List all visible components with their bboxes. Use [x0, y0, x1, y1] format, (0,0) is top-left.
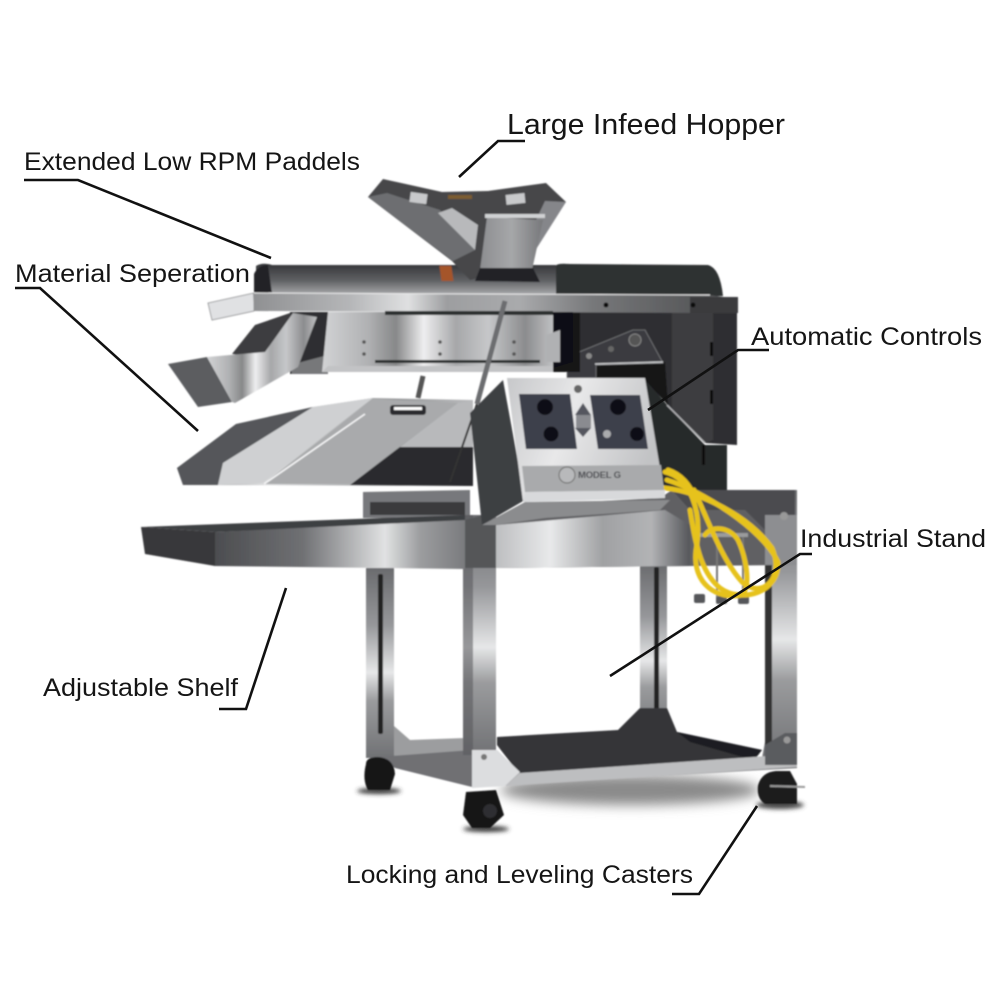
- pan right face: [400, 402, 473, 447]
- callout: large infeed hopper: Large Infeed Hopper: [507, 109, 785, 141]
- casters: [364, 757, 805, 828]
- callout: extended low rpm paddels: Extended Low RPM Paddels: [24, 148, 360, 176]
- callout: material seperation: [15, 260, 250, 431]
- control box face: [507, 378, 665, 502]
- direction arrows: [575, 403, 591, 437]
- top rail: [253, 293, 738, 313]
- brand text: MODEL G: [578, 470, 621, 481]
- front left leg: [463, 515, 520, 788]
- lower rails: [378, 733, 797, 787]
- hose fittings: [694, 533, 749, 604]
- control box side: [470, 380, 525, 525]
- yellow air hoses: [665, 470, 778, 596]
- pan bright band: [218, 398, 373, 485]
- callout: material seperation: Material Seperation: [15, 260, 250, 288]
- lower separation pan: [177, 376, 473, 486]
- left lip: [208, 293, 254, 320]
- brand logo: [559, 467, 575, 483]
- callout: large infeed hopper: [459, 109, 785, 177]
- right dial panel: [590, 395, 648, 449]
- callout: adjustable shelf: [43, 588, 286, 709]
- under box: [290, 311, 573, 374]
- gas strut: [450, 301, 505, 482]
- callout: adjustable shelf: Adjustable Shelf: [43, 674, 238, 702]
- callout: automatic controls: Automatic Controls: [751, 323, 982, 351]
- control box: [470, 378, 670, 525]
- hopper: [368, 179, 566, 282]
- callout: extended low rpm paddels: [24, 148, 360, 258]
- pan left dark face: [177, 407, 313, 485]
- dial knobs: [537, 399, 644, 442]
- callout: locking and leveling casters: Locking and Leveling Casters: [346, 861, 693, 889]
- right dark housing: [550, 264, 737, 490]
- left dial panel: [519, 394, 577, 449]
- model band: [522, 465, 664, 492]
- back legs: [366, 564, 667, 760]
- lower shelf: [497, 708, 762, 775]
- adjustable shelf: [141, 515, 465, 569]
- callout: automatic controls: [648, 323, 982, 410]
- sub tray: [363, 490, 470, 518]
- drum housing: [254, 264, 556, 294]
- right leg: [765, 490, 797, 765]
- pan center face: [263, 399, 458, 484]
- callout: industrial stand: Industrial Stand: [800, 525, 986, 553]
- callout: locking and leveling casters: [346, 806, 757, 894]
- callout: industrial stand: [610, 525, 986, 676]
- floor shadow: [357, 775, 804, 832]
- stand top frame: [465, 490, 797, 568]
- left discharge chute: [168, 313, 317, 407]
- machine illustration: [141, 179, 805, 832]
